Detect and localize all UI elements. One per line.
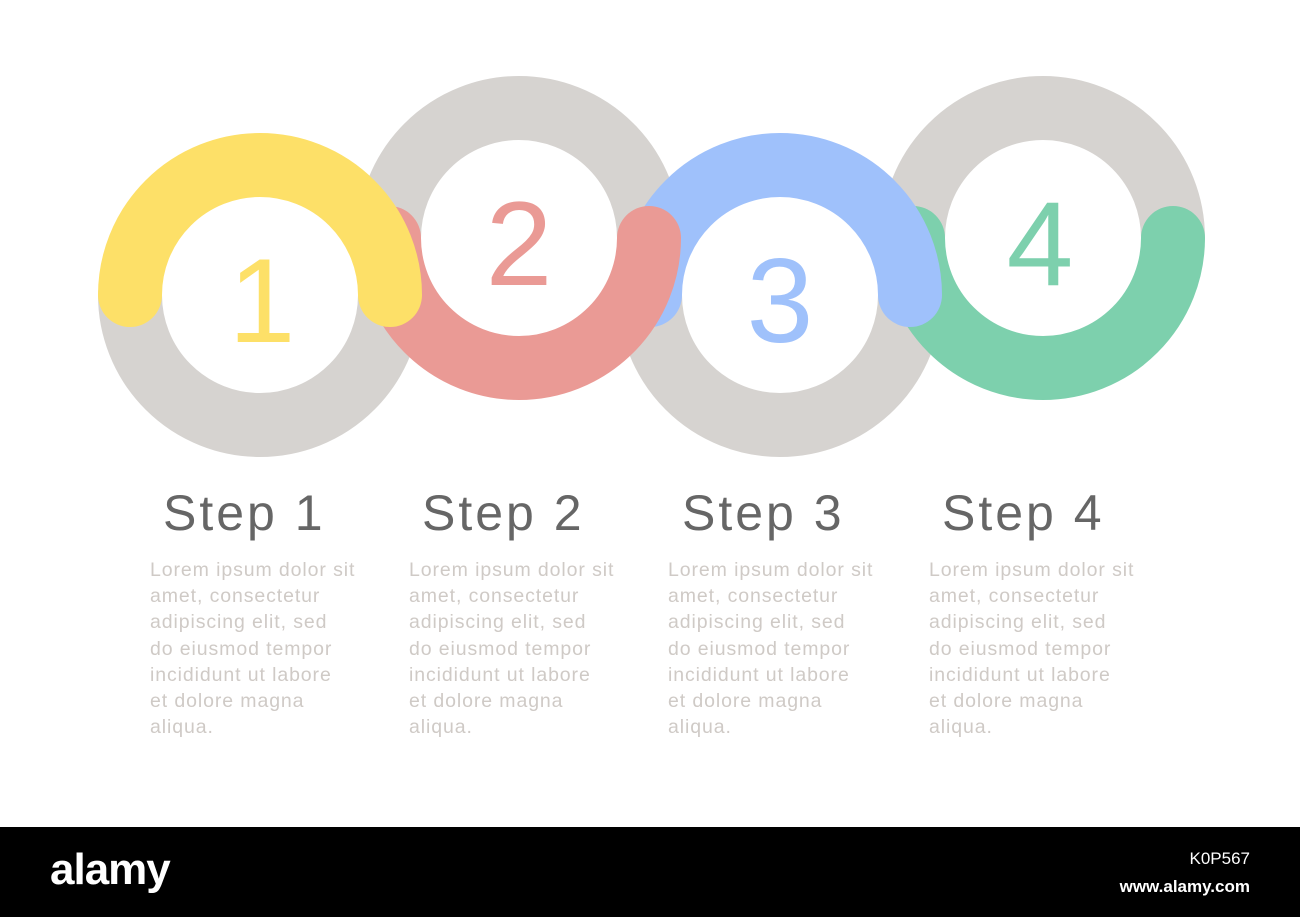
number 4: 4 — [1007, 177, 1073, 311]
step 1 text: aliqua. — [150, 716, 214, 738]
footer bar — [0, 827, 1300, 917]
ring 1 yellow arc — [130, 165, 390, 295]
step 2 text — [409, 559, 614, 738]
step 1 heading: Step 1 — [163, 485, 326, 541]
number 2: 2 — [486, 177, 552, 311]
step 2 text: amet, consectetur — [409, 585, 579, 607]
step 4 text: adipiscing elit, sed — [929, 611, 1106, 633]
step 2 text: Lorem ipsum dolor sit — [409, 559, 614, 581]
step 1 text: amet, consectetur — [150, 585, 320, 607]
step 2 text: et dolore magna — [409, 690, 563, 712]
step 3 text: aliqua. — [668, 716, 732, 738]
ring 2 red arc — [389, 238, 649, 368]
step 2 text: aliqua. — [409, 716, 473, 738]
step 2 text: incididunt ut labore — [409, 664, 591, 686]
step 3 text: incididunt ut labore — [668, 664, 850, 686]
step 2 text: do eiusmod tempor — [409, 638, 591, 660]
image id: K0P567 — [1190, 849, 1250, 868]
url: www.alamy.com — [1120, 877, 1250, 896]
logo: alamy — [50, 845, 170, 894]
step 4 text: Lorem ipsum dolor sit — [929, 559, 1134, 581]
number 3: 3 — [747, 234, 813, 368]
step 3 heading: Step 3 — [682, 485, 845, 541]
step 3 text: Lorem ipsum dolor sit — [668, 559, 873, 581]
number 1: 1 — [229, 234, 295, 368]
ring 3 blue arc — [650, 165, 910, 295]
step 2 heading: Step 2 — [422, 485, 585, 541]
step 4 text — [929, 559, 1134, 738]
step 1 text — [150, 559, 355, 738]
step 1 text: incididunt ut labore — [150, 664, 332, 686]
step 3 text: adipiscing elit, sed — [668, 611, 845, 633]
step 4 text: et dolore magna — [929, 690, 1083, 712]
step 1 text: adipiscing elit, sed — [150, 611, 327, 633]
step 2 text: adipiscing elit, sed — [409, 611, 586, 633]
step 4 text: incididunt ut labore — [929, 664, 1111, 686]
step 4 text: aliqua. — [929, 716, 993, 738]
step 4 heading: Step 4 — [942, 485, 1105, 541]
ring chain diagram — [98, 76, 1205, 457]
ring 4 green arc — [913, 238, 1173, 368]
step 3 text: et dolore magna — [668, 690, 822, 712]
step 4 text: amet, consectetur — [929, 585, 1099, 607]
step 1 text: Lorem ipsum dolor sit — [150, 559, 355, 581]
gray ring halves — [130, 108, 1173, 425]
step 3 text: amet, consectetur — [668, 585, 838, 607]
step 4 text: do eiusmod tempor — [929, 638, 1111, 660]
step 3 text: do eiusmod tempor — [668, 638, 850, 660]
step 1 text: et dolore magna — [150, 690, 304, 712]
step 3 text — [668, 559, 873, 738]
step 1 text: do eiusmod tempor — [150, 638, 332, 660]
